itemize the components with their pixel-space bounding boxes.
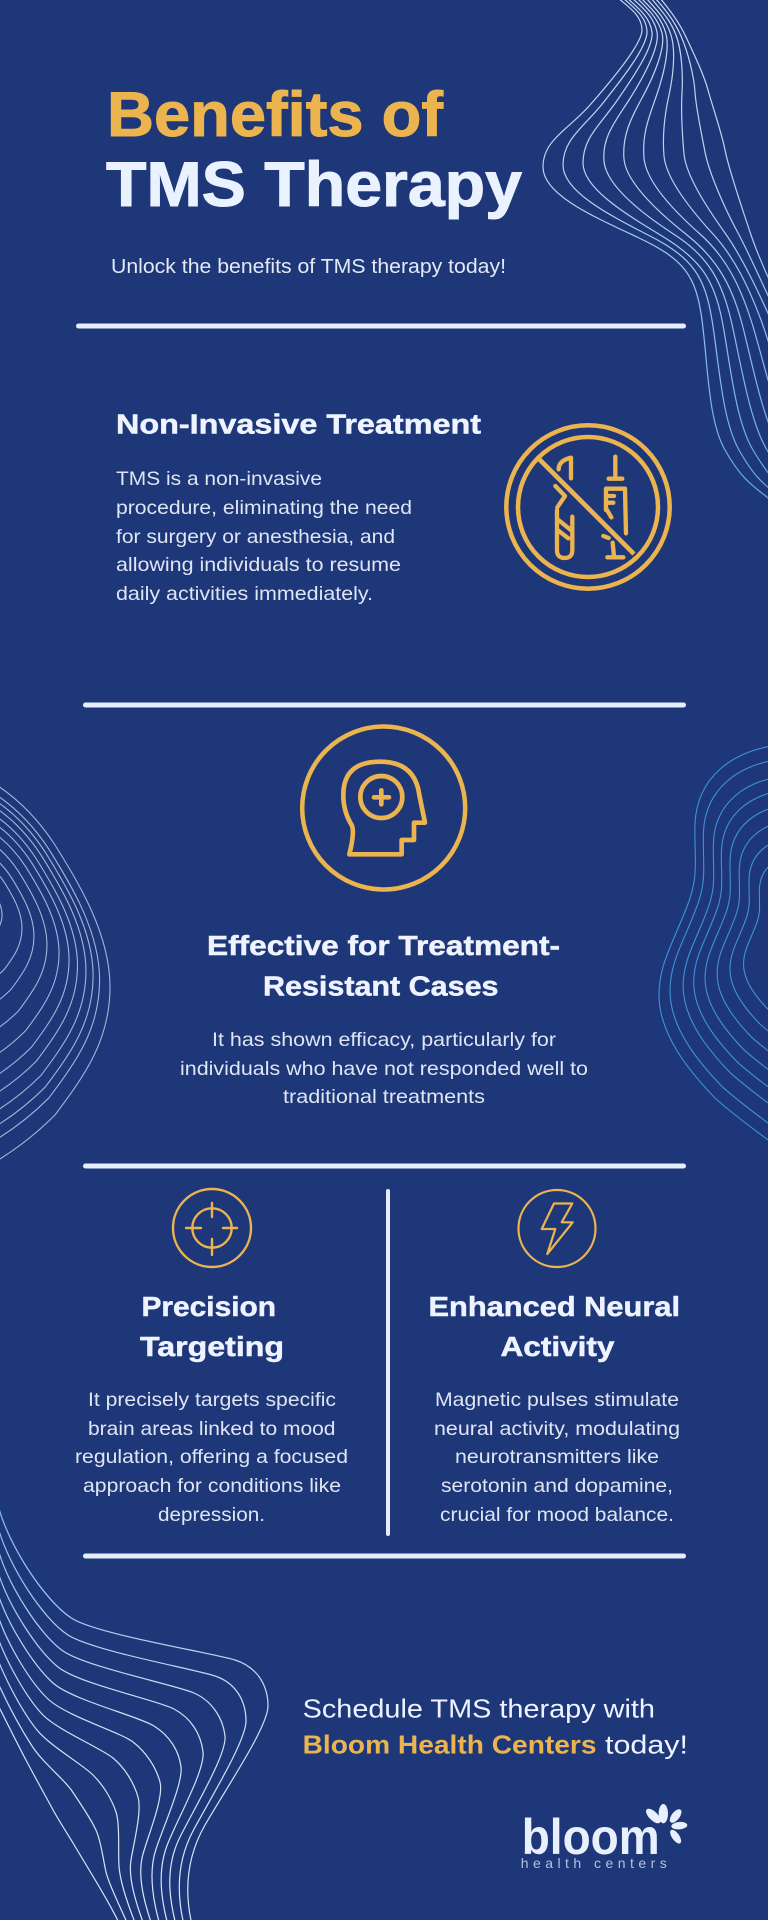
panel: precision targeting — [75, 1189, 348, 1526]
text block: non-invasive description: daily activities immediately. — [116, 583, 373, 605]
title line: Benefits of: Benefits of — [107, 80, 444, 150]
heading: enhanced neural activity: Enhanced Neural — [428, 1291, 680, 1322]
icon: no scalpel or syringe — [506, 425, 670, 589]
logo flower — [644, 1804, 688, 1845]
text block: precision description — [75, 1389, 348, 1526]
logo tagline: health centers — [521, 1855, 667, 1871]
subtitle: Unlock the benefits of TMS therapy today! — [111, 256, 506, 278]
heading: enhanced neural activity — [428, 1291, 680, 1362]
heading: precision targeting — [140, 1291, 284, 1362]
panel: non-invasive treatment — [116, 408, 670, 605]
text block: precision description: depression. — [158, 1504, 265, 1526]
text block: precision description: regulation, offering a focused — [75, 1446, 348, 1468]
text block: precision description: It precisely targets specific — [88, 1389, 336, 1411]
text block: non-invasive description: for surgery or anesthesia, and — [116, 526, 395, 548]
icon: head with plus — [302, 726, 465, 890]
heading: effective for treatment-resistant cases: Effective for Treatment- — [207, 930, 560, 961]
text block: efficacy description: individuals who have not responded well to — [180, 1058, 588, 1080]
heading: effective for treatment-resistant cases — [207, 930, 560, 1002]
divider 2 — [83, 702, 686, 708]
logo: bloom health centers — [521, 1804, 688, 1871]
call to action: Bloom Health Centers — [303, 1730, 596, 1760]
divider 4 — [83, 1554, 686, 1558]
text block: efficacy description — [180, 1029, 588, 1108]
text block: neural description — [434, 1389, 680, 1526]
title line: TMS Therapy: TMS Therapy — [106, 150, 522, 220]
text block: neural description: neurotransmitters like — [455, 1446, 659, 1468]
logo wordmark: bloom — [522, 1809, 660, 1865]
call to action: Schedule TMS therapy with — [303, 1694, 655, 1724]
text block: neural description: serotonin and dopamine, — [441, 1475, 673, 1497]
text block: non-invasive description: TMS is a non-invasive — [116, 468, 322, 490]
panel: enhanced neural activity — [428, 1190, 680, 1526]
heading: non-invasive treatment: Non-Invasive Treatment — [116, 408, 481, 440]
icon: crosshair target — [173, 1189, 251, 1267]
call to action: today! — [605, 1730, 688, 1760]
heading: precision targeting: Targeting — [140, 1331, 284, 1362]
heading: effective for treatment-resistant cases: Resistant Cases — [263, 970, 498, 1002]
heading: precision targeting: Precision — [142, 1291, 276, 1322]
text block: efficacy description: It has shown efficacy, particularly for — [212, 1029, 557, 1051]
text block: non-invasive description: allowing individuals to resume — [116, 554, 401, 576]
icon: lightning bolt — [518, 1190, 596, 1267]
text block: precision description: approach for conditions like — [83, 1475, 341, 1497]
text block: neural description: crucial for mood balance. — [440, 1504, 674, 1526]
vertical divider — [386, 1189, 390, 1536]
text block: neural description: Magnetic pulses stimulate — [435, 1389, 679, 1411]
heading: enhanced neural activity: Activity — [500, 1331, 615, 1362]
text block: non-invasive description — [116, 468, 412, 605]
text block: efficacy description: traditional treatments — [283, 1086, 485, 1108]
divider 3 — [83, 1164, 686, 1168]
title — [106, 80, 522, 220]
panel: effective for treatment-resistant cases — [180, 726, 588, 1108]
text block: precision description: brain areas linked to mood — [88, 1418, 336, 1440]
text block: neural description: neural activity, modulating — [434, 1418, 680, 1440]
text block: non-invasive description: procedure, eliminating the need — [116, 497, 412, 519]
call to action — [303, 1694, 688, 1760]
divider 1 — [76, 324, 686, 328]
